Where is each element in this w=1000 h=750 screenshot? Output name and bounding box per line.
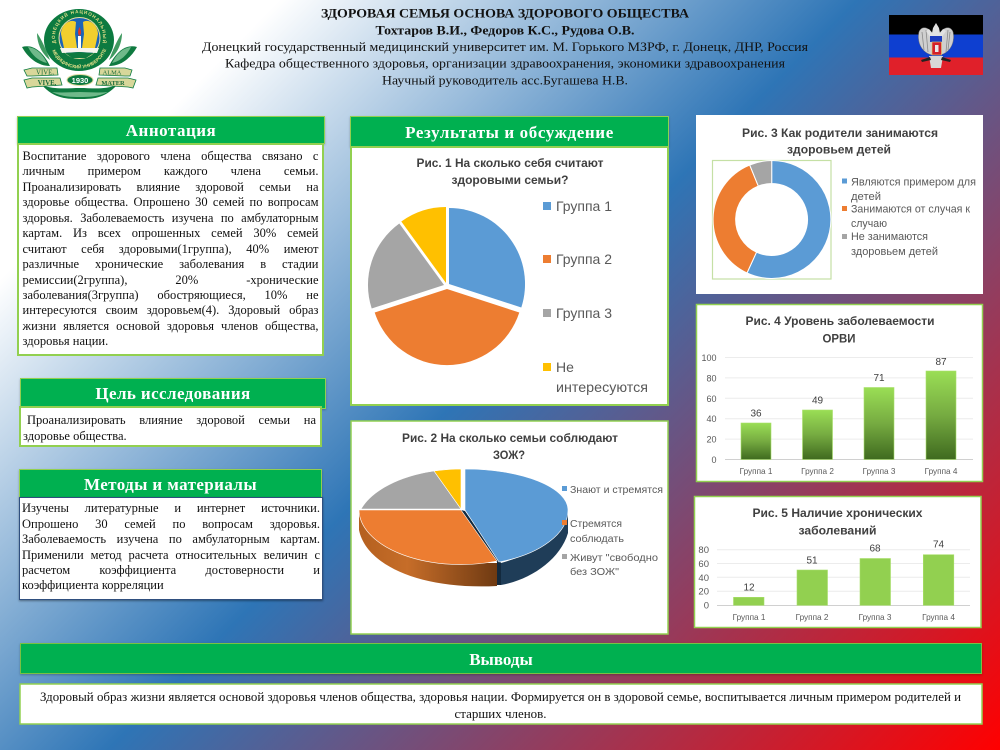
annotation text: личным примером каждого члена семьи. [22, 164, 318, 178]
annotation text: различные хронические заболевания в стадии [22, 257, 318, 271]
chart title: ОРВИ [822, 332, 856, 346]
heading: methods and materials [19, 469, 322, 498]
panel: figure 5 bar chart [694, 496, 982, 628]
department: Кафедра общественного здоровья, организации здравоохранения, экономики здравоохранения [225, 56, 785, 70]
pie legend: без ЗОЖ" [570, 566, 619, 578]
annotation text: жизни является основой здоровья членов общества, [22, 319, 318, 333]
heading: annotation: Аннотация [126, 121, 216, 140]
chart title: Рис. 5 Наличие хронических [752, 506, 923, 520]
bars [734, 555, 954, 605]
category labels: Группа 4 [925, 467, 958, 476]
pie legend: Не [556, 359, 574, 375]
chart title [402, 431, 618, 462]
annotation text: здоровье общества. Опрошено 30 семей по вопросам [22, 195, 318, 209]
pie legend [562, 484, 663, 578]
bars [741, 371, 956, 460]
annotation text: здоровья. Заболеваемость изучена по амбулаторным [22, 211, 318, 225]
methods text: Изучены литературные и интернет источники. [22, 501, 320, 515]
value labels: 74 [933, 540, 944, 550]
pie legend: интересуются [556, 379, 648, 395]
logo: university emblem [22, 9, 137, 99]
annotation body box [17, 143, 324, 356]
methods text: расчетом коэффициента достоверности и [22, 563, 320, 577]
methods body box [19, 497, 323, 600]
category labels: Группа 3 [863, 467, 896, 476]
donut legend: здоровьем детей [851, 246, 938, 258]
donut legend: случаю [851, 218, 887, 230]
heading: methods and materials: Методы и материалы [84, 475, 257, 494]
y axis and grid: 60 [698, 559, 709, 570]
pie sides [359, 510, 568, 586]
banner: vive vive [24, 68, 62, 88]
panel: research goal [19, 378, 327, 447]
annotation text [22, 149, 318, 348]
y axis and grid: 40 [698, 573, 709, 584]
annotation text: заболевания(3группа) обостряющиеся, 10% не [22, 288, 318, 302]
ring lettering: ДОНЕЦКИЙ НАЦИОНАЛЬНЫЙ [52, 10, 107, 44]
category labels: Группа 1 [733, 613, 766, 622]
authors: Тохтаров В.И., Федоров К.С., Рудова О.В. [376, 22, 634, 38]
goal body box [19, 406, 322, 447]
y axis and grid: 0 [704, 600, 709, 612]
goal text: здоровье общества. [23, 429, 127, 443]
panel: figure 3 donut chart [696, 115, 983, 294]
heading: conclusions [20, 643, 982, 674]
banner: vive vive: VIVE, [38, 80, 57, 87]
heading: research goal: Цель исследования [95, 384, 251, 403]
chart title: Рис. 2 На сколько семьи соблюдают [402, 431, 618, 445]
conclusions line 1: Здоровый образ жизни является основой здоровья членов общества, здоровья нации. Формируется он в здоровой семье, воспитывается личным примером родителей и [40, 690, 961, 704]
category labels: Группа 4 [922, 613, 955, 622]
category labels [733, 613, 955, 622]
pie legend: Группа 2 [556, 251, 612, 267]
goal text: Проанализировать влияние здоровой семьи на [27, 413, 316, 427]
chart title: ЗОЖ? [493, 448, 525, 462]
y axis and grid: 80 [706, 373, 716, 383]
panel: conclusions text [19, 683, 983, 725]
poster title: ЗДОРОВАЯ СЕМЬЯ ОСНОВА ЗДОРОВОГО ОБЩЕСТВА [321, 6, 690, 20]
annotation text: картам. Из всех опрошенных семей 30% семей [22, 226, 318, 240]
centre medallion [59, 18, 100, 58]
panel: annotation [16, 116, 326, 356]
conclusions line 2: старших членов. [454, 707, 546, 721]
pie legend: соблюдать [570, 533, 625, 545]
category labels: Группа 2 [796, 613, 829, 622]
pie legend: Группа 1 [556, 198, 612, 214]
banner: alma mater [96, 68, 136, 88]
chart title: Рис. 1 На сколько себя считают [416, 156, 604, 170]
y axis and grid: 0 [711, 455, 716, 465]
flag with coat of arms [889, 15, 983, 75]
value labels: 71 [873, 373, 885, 384]
founding year: 1930 [72, 76, 88, 85]
donut legend [842, 176, 976, 258]
value labels [750, 357, 947, 420]
pie legend: Живут "свободно [570, 552, 658, 564]
y axis and grid: 20 [706, 435, 716, 445]
chart title: здоровьем детей [787, 142, 891, 156]
value labels: 51 [806, 556, 818, 566]
annotation text: здоровья нации. [22, 334, 108, 348]
annotation text: ремиссии(2группа), 20% -хронические [22, 272, 318, 286]
methods text: Применили метод расчета относительных величин с [22, 548, 320, 562]
heading: conclusions: Выводы [469, 650, 533, 669]
pie legend: Стремятся [570, 518, 622, 530]
heading: research goal [20, 378, 326, 409]
pie legend: Знают и стремятся [570, 484, 663, 496]
value labels: 68 [869, 544, 881, 554]
coat of arms eagle [918, 23, 954, 68]
chart title: Рис. 3 Как родители занимаются [742, 126, 938, 140]
value labels [743, 540, 944, 594]
goal text [23, 413, 316, 443]
banner: vive vive: VIVE, [36, 70, 54, 76]
annotation text: Проанализировать влияние здоровой семьи на [22, 180, 318, 194]
y axis and grid: 20 [698, 586, 709, 598]
pie legend: Группа 3 [556, 305, 612, 321]
y axis and grid: 80 [698, 545, 709, 556]
heading: annotation [17, 116, 325, 144]
category labels: Группа 3 [859, 613, 892, 622]
panel: figure 2 3D pie chart [350, 420, 669, 635]
annotation text: Воспитание здорового члена общества связано с [22, 149, 318, 163]
value labels: 87 [935, 357, 947, 368]
chart title [416, 156, 604, 187]
chart title [752, 506, 923, 538]
donut legend: Являются примером для [851, 176, 976, 188]
chart title: здоровыми семьи? [452, 173, 568, 187]
panel: figure 4 bar chart [696, 304, 984, 482]
pie slices [368, 207, 525, 365]
methods text: коэффициента корреляции [22, 578, 164, 592]
title block [202, 6, 808, 88]
banner: alma mater: ALMA [103, 70, 122, 76]
emblem ring [44, 9, 114, 71]
category labels: Группа 1 [740, 467, 773, 476]
donut legend: Занимаются от случая к [851, 204, 970, 216]
category labels [740, 467, 958, 476]
heading: results and discussion: Результаты и обсуждение [405, 123, 614, 142]
donut frame [712, 160, 831, 279]
panel: figure 1 pie chart [350, 147, 669, 406]
value labels: 36 [750, 408, 762, 420]
methods text [22, 501, 320, 592]
pie top slices [359, 469, 568, 565]
annotation text: считают себя здоровыми(1группа), 40% имеют [22, 242, 318, 256]
supervisor: Научный руководитель асс.Бугашева Н.В. [382, 72, 628, 88]
pie legend [543, 198, 648, 395]
y axis and grid: 100 [701, 353, 716, 363]
donut segments [713, 160, 831, 278]
methods text: Опрошено 30 семей по вопросам здоровья. [22, 517, 320, 531]
value labels: 12 [743, 582, 755, 594]
chart title: Рис. 4 Уровень заболеваемости [746, 314, 934, 328]
category labels: Группа 2 [801, 467, 834, 476]
university: Донецкий государственный медицинский университет им. М. Горького МЗРФ, г. Донецк, ДНР, Россия [202, 39, 808, 54]
y axis and grid [701, 353, 973, 465]
y axis and grid: 60 [706, 394, 716, 404]
donut legend: Не занимаются [851, 231, 928, 243]
donut legend: детей [851, 191, 881, 203]
chart title [746, 314, 934, 346]
y axis and grid: 40 [706, 414, 716, 424]
laurel wreath [22, 33, 137, 99]
heading: results and discussion [350, 116, 669, 147]
y axis and grid [698, 545, 970, 612]
methods text: Заболеваемость изучена по амбулаторным картам. [22, 532, 320, 546]
chart title: заболеваний [798, 524, 876, 538]
annotation text: интересуются своим здоровьем(4). Здоровый образ [22, 303, 318, 317]
banner: alma mater: MATER [101, 80, 125, 87]
panel: methods and materials [18, 469, 324, 602]
value labels: 49 [812, 396, 823, 406]
chart title [742, 126, 938, 156]
